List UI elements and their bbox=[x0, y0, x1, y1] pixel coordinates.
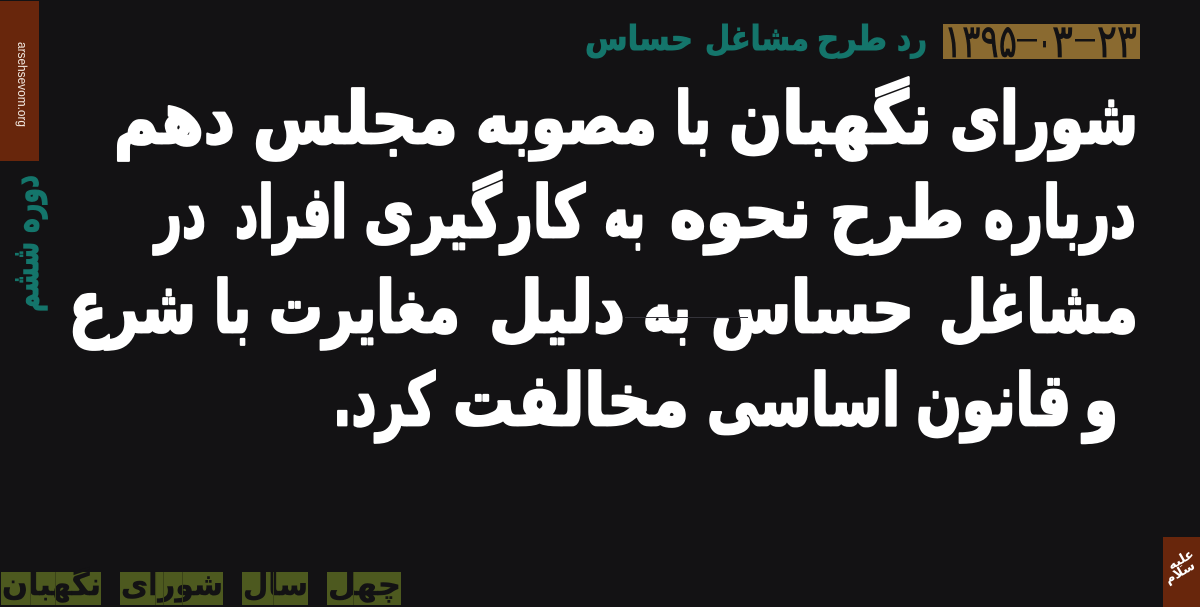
footer series title: شورای bbox=[121, 567, 223, 603]
date badge bbox=[943, 14, 1140, 68]
footer series title: نگهبان bbox=[2, 566, 101, 603]
main headline: مصوبه bbox=[476, 76, 657, 161]
main headline bbox=[69, 76, 1138, 443]
date badge: ۱۳۹۵ bbox=[944, 14, 1017, 68]
vertical label: term: دوره ششم bbox=[3, 175, 48, 312]
main headline: دلیل bbox=[489, 265, 625, 349]
logo badge bbox=[1162, 537, 1200, 607]
main headline: به bbox=[604, 170, 645, 254]
footer series title: چهل bbox=[328, 567, 401, 603]
date badge: ۳ bbox=[1052, 14, 1073, 68]
main headline: درباره bbox=[984, 170, 1136, 255]
subtitle: مشاغل bbox=[705, 19, 809, 59]
subtitle: رد bbox=[897, 19, 927, 59]
subtitle bbox=[585, 19, 927, 59]
footer series title: سال bbox=[243, 567, 308, 603]
main headline: مغایرت bbox=[269, 265, 460, 350]
main headline: قانون bbox=[916, 358, 1071, 443]
main headline: با bbox=[214, 265, 251, 349]
main headline: شورای bbox=[950, 76, 1138, 161]
logo badge: سلام bbox=[1162, 558, 1198, 587]
main headline: طرح bbox=[830, 170, 964, 255]
main headline: به bbox=[643, 265, 691, 349]
main headline: حساس bbox=[711, 265, 914, 349]
date badge: ۰ bbox=[1038, 14, 1051, 68]
main headline: مخالفت bbox=[453, 358, 689, 442]
main headline: مشاغل bbox=[939, 265, 1138, 349]
main headline: شرع bbox=[69, 265, 196, 350]
main headline: و bbox=[1082, 358, 1118, 443]
main headline: در bbox=[153, 170, 206, 255]
main headline: نحوه bbox=[670, 170, 811, 255]
logo badge: علیه bbox=[1166, 547, 1197, 573]
panel: website tab bbox=[0, 1, 39, 161]
main headline: دهم bbox=[114, 76, 235, 161]
main headline: مجلس bbox=[253, 76, 458, 160]
main headline: با bbox=[675, 76, 711, 160]
subtitle: حساس bbox=[585, 19, 693, 59]
main headline: کرد. bbox=[333, 358, 435, 443]
main headline: نگهبان bbox=[729, 76, 932, 161]
main headline: افراد bbox=[235, 170, 347, 255]
main headline: کارگیری bbox=[364, 170, 585, 255]
main headline: اساسی bbox=[707, 358, 900, 442]
panel: website tab: arsehsevom.org bbox=[15, 42, 29, 127]
date badge: ۲۳ bbox=[1097, 14, 1137, 68]
subtitle: طرح bbox=[817, 19, 887, 59]
footer series title bbox=[1, 566, 401, 605]
